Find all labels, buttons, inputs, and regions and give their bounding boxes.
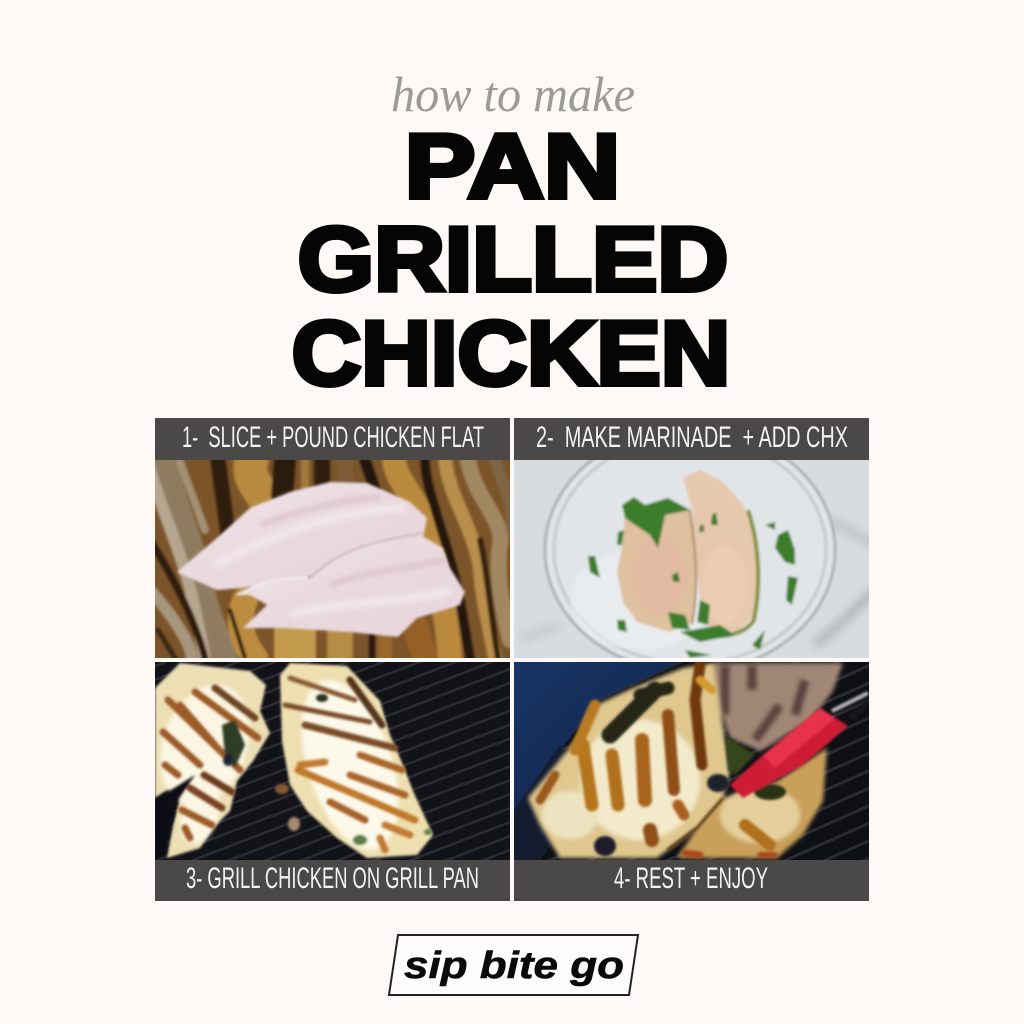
logo: sip bite go: sip bite go <box>404 945 624 987</box>
caption bar 1: 1- SLICE + POUND CHICKEN FLAT <box>182 421 484 454</box>
caption bar 3: 3- GRILL CHICKEN ON GRILL PAN <box>186 862 479 895</box>
title: PAN GRILLED CHICKEN: PAN <box>405 116 620 218</box>
caption bar 3 <box>155 860 510 901</box>
caption bar 4: 4- REST + ENJOY <box>614 862 768 895</box>
caption bar 1 <box>155 418 510 460</box>
logo: sip bite go <box>389 935 638 995</box>
caption bar 2: 2- MAKE MARINADE + ADD CHX <box>536 421 848 454</box>
infographic canvas <box>155 76 869 996</box>
panel 2: make marinade and add chicken <box>514 418 875 672</box>
photo: grilled chicken being brushed with a red basting brush <box>514 662 869 861</box>
photo: chicken with char marks on a grill pan <box>144 662 510 862</box>
photo: raw chicken on a wooden board <box>150 458 513 658</box>
title: PAN GRILLED CHICKEN: CHICKEN <box>292 304 730 404</box>
script subtitle: how to make: how to make <box>391 66 635 122</box>
photo: chicken marinating in a glass bowl <box>514 460 869 658</box>
title: PAN GRILLED CHICKEN: GRILLED <box>298 210 728 310</box>
panel 3: grill chicken on grill pan <box>144 662 510 901</box>
panel 1: slice and pound chicken flat <box>150 418 513 658</box>
title: PAN GRILLED CHICKEN <box>292 116 730 404</box>
caption bar 2 <box>514 418 869 460</box>
panel 4: rest and enjoy <box>514 662 869 901</box>
caption bar 4 <box>514 860 869 901</box>
